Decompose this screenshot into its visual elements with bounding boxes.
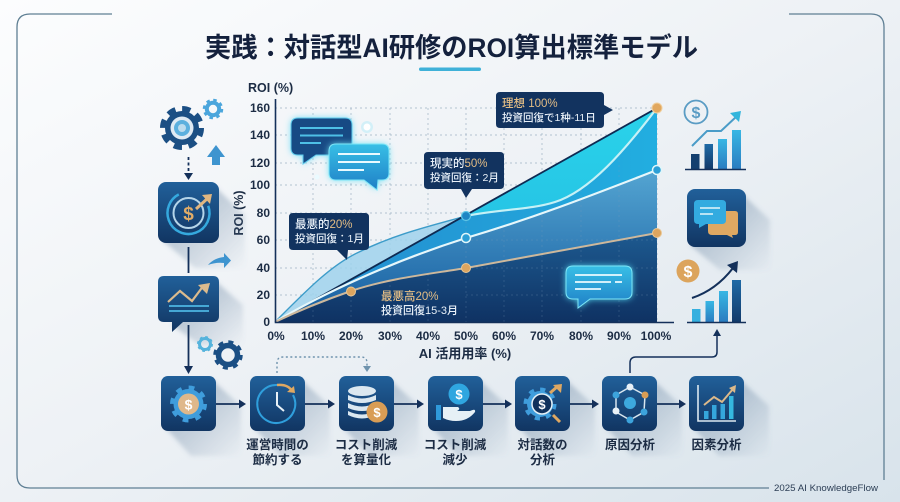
flow step 6: root cause [602,376,682,456]
label: を算量化 [341,452,391,467]
flow step 7: factor analysis [689,376,769,456]
callout: in-chart label: 投資回復15-3月 [381,303,458,317]
y axis ticks: 40 [257,261,270,275]
title underline [419,68,481,71]
area: navy band [275,233,657,322]
x axis ticks: 40% [416,329,440,343]
icon: small blue gear [204,100,222,118]
line: realistic [275,170,657,322]
flow step 4: cost reduction: $ [455,387,463,402]
label: 因素分析 [691,437,742,452]
y axis title: ROI (%) [248,81,293,95]
y axis ticks: 160 [250,101,270,115]
label: 対話数の [517,437,568,452]
x axis ticks: 0% [267,329,285,343]
line: ideal curve [466,108,657,216]
arrow [657,400,686,408]
callout: realistic: 現実的50% [430,156,488,170]
callout: realistic [424,152,504,198]
callout: ideal: 理想 100% [502,97,558,110]
flow step 3: quantify savings [335,376,419,467]
flow step 5: conversation analysis [515,376,595,467]
axes [276,99,674,322]
y axis ticks: 0 [263,315,270,329]
icon: chart chat bubble [566,266,632,308]
area: cyan band [466,108,657,322]
icon: right bar chart: $ [692,105,701,122]
icon: dark chat bubble [291,118,352,164]
area: mid blue band [275,108,657,322]
x axis title: AI 活用用率 (%) [419,346,511,361]
x axis ticks: 70% [530,329,554,343]
x axis ticks: 10% [301,329,325,343]
flow step 3: quantify savings: $ [373,405,381,420]
data points [346,103,662,296]
x axis ticks: 60% [492,329,516,343]
arrow [216,400,246,408]
flow step 5: conversation analysis: $ [538,397,546,412]
line: ideal straight [275,108,657,322]
icon: coin and growth bars: $ [684,264,693,281]
chart: ROI vs AI utilisation [232,81,674,361]
title: 実践：対話型AI研修のROI算出標準モデル [205,32,698,63]
icon: large gear [164,110,200,146]
flow step 1: cost gear: $ [185,396,193,412]
arrow: gear to target [184,157,193,180]
icon: target tile [158,182,245,268]
flow step 1: cost gear [161,376,241,456]
footer credit: 2025 AI KnowledgeFlow [774,483,878,494]
label: コスト削減 [424,437,487,452]
x axis ticks: 100% [641,329,672,343]
icon: light chat bubble [314,121,389,190]
y axis ticks: 80 [257,206,270,220]
icon: side arrow [208,253,231,268]
flow step 2: time saving [246,376,330,467]
callout: ideal [496,92,613,128]
callout: realistic: 投資回復：2月 [430,171,499,184]
y axis ticks: 100 [250,178,270,192]
x axis ticks: 20% [339,329,363,343]
x axis ticks: 80% [569,329,593,343]
callout: worst: 投資回復：1月 [295,232,364,245]
callout: ideal: 投資回復で1种-11日 [502,111,596,124]
icon: small gears [198,337,241,368]
arrow: target to chart [188,247,190,273]
rotated y axis title: ROI (%) [232,190,246,236]
x axis ticks [267,329,672,343]
arrow: chart to flow [184,325,193,374]
y axis ticks: 20 [257,288,270,302]
x axis ticks: 90% [607,329,631,343]
y axis ticks: 120 [250,156,270,170]
connector: dotted loop [277,357,371,373]
y axis ticks [250,101,270,329]
x axis ticks: 50% [454,329,478,343]
callout: in-chart label [381,289,458,317]
label: 節約する [252,452,303,467]
icon: up arrow [207,145,225,165]
area: light band above line [275,216,466,322]
icon: right bar chart [684,100,746,170]
x axis ticks: 30% [378,329,402,343]
callout: in-chart label: 最悪高20% [381,289,439,303]
callout: worst: 最悪的20% [295,217,353,231]
area: lower blue band [275,170,657,322]
label: 分析 [530,452,555,467]
flow step 4: cost reduction [424,376,508,467]
arrow [483,400,512,408]
arrow [394,400,424,408]
label: 原因分析 [605,437,655,452]
icon: coin and growth bars [676,260,746,322]
label: 運営時間の [246,437,309,452]
arrow [570,400,599,408]
icon: chart bubble tile [158,276,243,345]
line: worst [275,233,657,322]
label: 減少 [442,452,468,467]
connector: elbow to bar chart [630,329,721,373]
icon: conversation tile [687,189,770,270]
callout: worst [289,213,369,260]
y axis ticks: 60 [257,233,270,247]
label: コスト削減 [335,437,398,452]
arrow [305,400,335,408]
y axis ticks: 140 [250,128,270,142]
icon: target tile: $ [183,204,194,225]
